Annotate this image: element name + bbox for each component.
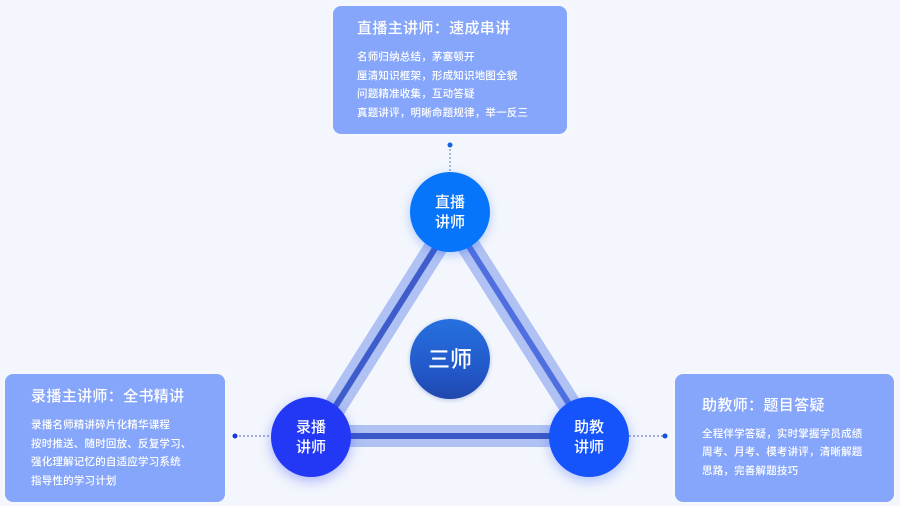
text: teaching assistant details: 周考、月考、模考讲评，清晰解题 [702,446,862,458]
text: recorded lecturer details: 强化理解记忆的自适应学习系统 [31,456,181,468]
text: live lecturer details: 真题讲评，明晰命题规律，举一反三 [357,106,528,118]
node: recorded lecturer: 录播 [296,419,326,436]
heading: recorded lecturer: 录播主讲师：全书精讲 [31,388,185,405]
node: teaching assistant: 讲师 [574,439,604,456]
text: teaching assistant details: 思路，完善解题技巧 [702,464,798,476]
node: centre three teachers: 三师 [428,347,472,372]
text: live lecturer details [357,51,528,118]
node: centre three teachers [410,319,490,399]
leader: top [448,142,452,172]
text: teaching assistant details [702,428,862,476]
heading: teaching assistant: 助教师：题目答疑 [702,397,825,414]
connector: top to left [316,212,458,437]
node: live lecturer [410,172,490,252]
node: live lecturer: 直播 [435,194,465,211]
node: teaching assistant [549,397,629,477]
text: live lecturer details: 厘清知识框架，形成知识地图全貌 [357,70,518,82]
leader: left [232,434,271,438]
connector: left to right [311,425,589,447]
node: recorded lecturer: 讲师 [296,439,326,456]
leader: right [629,434,668,438]
panel: live lecturer [333,6,567,134]
heading: live lecturer: 直播主讲师：速成串讲 [357,20,511,37]
panel: teaching assistant [675,374,894,502]
text: recorded lecturer details: 指导性的学习计划 [31,474,117,486]
node: teaching assistant: 助教 [574,419,604,436]
text: teaching assistant details: 全程伴学答疑，实时掌握学员成绩 [702,428,862,440]
connector: top to right [447,212,590,437]
text: live lecturer details: 名师归纳总结，茅塞顿开 [357,51,475,63]
text: recorded lecturer details: 录播名师精讲碎片化精华课程 [31,419,170,431]
node: live lecturer: 讲师 [435,214,465,231]
text: recorded lecturer details [31,419,192,486]
text: live lecturer details: 问题精准收集，互动答疑 [357,88,475,100]
text: recorded lecturer details: 按时推送、随时回放、反复学习、 [31,438,192,450]
panel: recorded lecturer [5,374,225,502]
node: recorded lecturer [271,397,351,477]
